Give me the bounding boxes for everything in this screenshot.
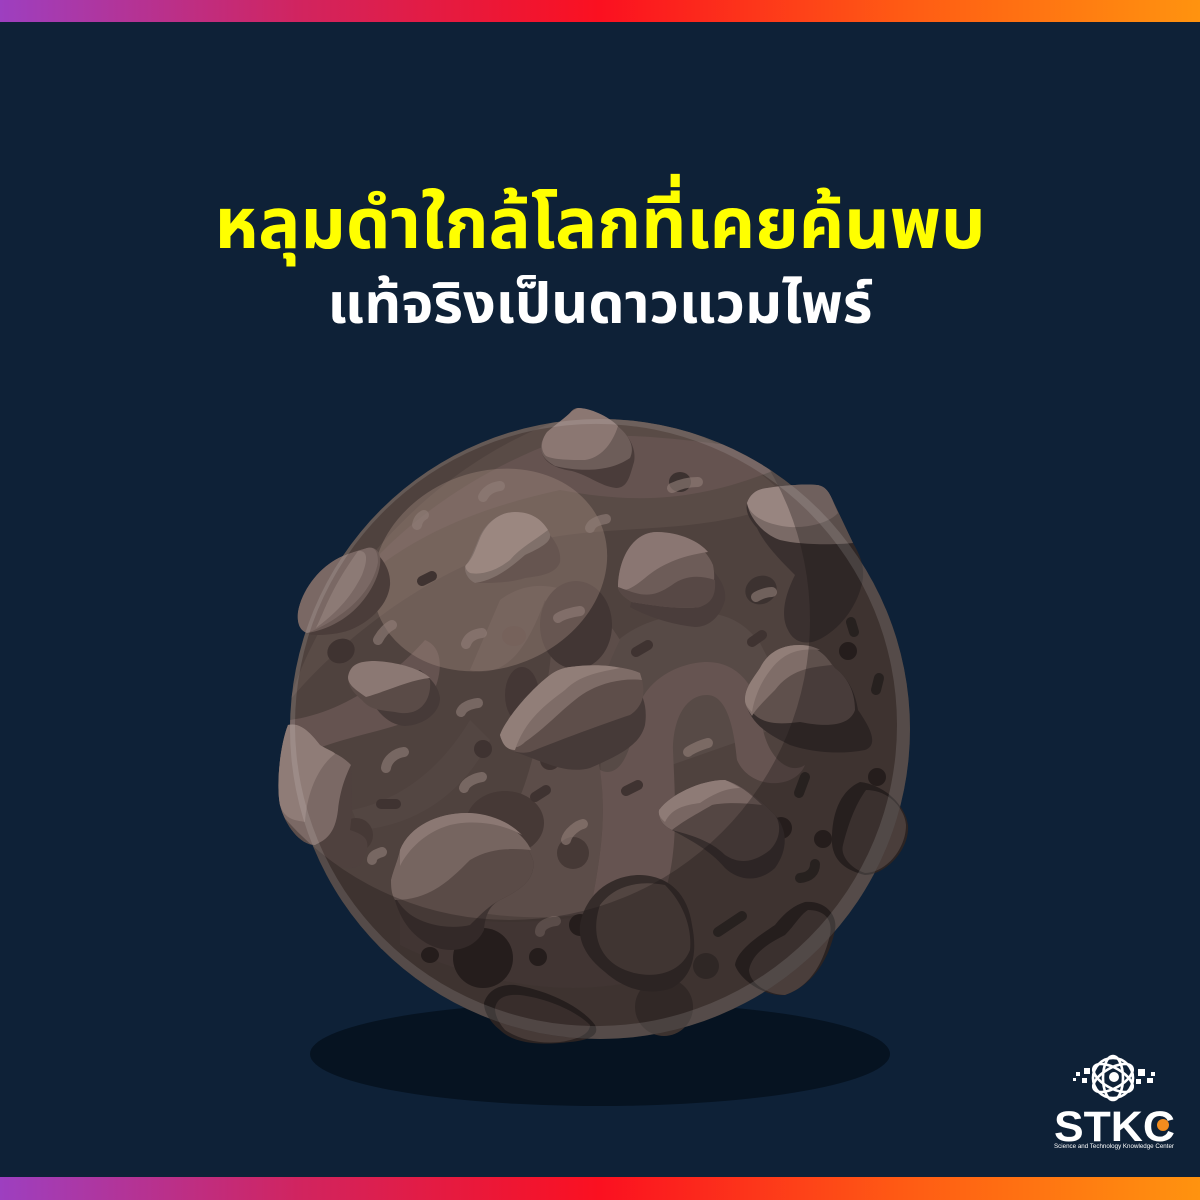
surface marks [372,482,879,932]
rock: dark right edge [832,782,908,875]
rock: dark bottom [484,985,596,1044]
bright upper-left overlay [342,434,638,706]
rock: far left large [278,724,367,868]
rock: lower right of centre [659,780,785,878]
rock: dark lower right [735,902,835,995]
rock: right of centre [745,645,872,752]
rock: top right [747,485,863,643]
craters [323,472,886,1036]
rock: far left [298,548,390,635]
brown meander band [590,662,805,912]
rock: upper centre [465,512,560,583]
rim [290,419,910,1039]
bottom gradient bar [0,1177,1200,1200]
title: หลุมดำใกล้โลกที่เคยค้นพบ [214,174,986,267]
shaded crescent overlay [285,470,910,1039]
icon: atom with pixels [1073,1056,1155,1100]
tagline: Science and Technology Knowledge Center [1054,1144,1174,1150]
wordmark: STKC [1054,1103,1175,1151]
logo: STKC [1054,1056,1175,1151]
rock: left small [348,661,440,726]
rock: top [541,408,634,488]
rock: centre [500,665,646,770]
planet illustration [278,408,910,1044]
icon: orange dot [1157,1119,1169,1131]
rock: upper right of centre [618,532,725,627]
rock: dark lower centre [580,875,694,991]
subtitle: แท้จริงเป็นดาวแวมไพร์ [328,272,873,335]
planet shadow [310,1002,890,1106]
top gradient bar [0,0,1200,22]
rock: lower left large [391,813,533,950]
planet body [290,415,910,1039]
